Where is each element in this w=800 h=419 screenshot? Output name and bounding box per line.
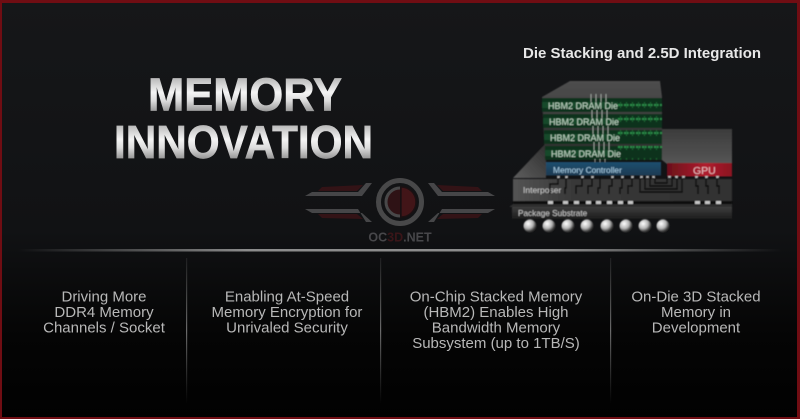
text: memory encryption: Unrivaled Security [226, 320, 348, 336]
HBM2 DRAM die 2: HBM2 DRAM Die [549, 117, 619, 127]
through-silicon vias [591, 94, 609, 166]
watermark logo: OC3D.NET [305, 180, 495, 244]
GPU die [667, 163, 732, 177]
text: DDR4 memory channels: DDR4 Memory [54, 304, 154, 321]
text: HBM2 stacked memory: Subsystem (up to 1TB/S) [412, 335, 580, 352]
memory controller [546, 162, 661, 176]
solder balls [524, 220, 670, 232]
horizontal divider [18, 249, 782, 252]
HBM2 DRAM die 4 [545, 146, 662, 160]
title: Memory Innovation: INNOVATION [114, 116, 373, 168]
text: DDR4 memory channels: Driving More [61, 288, 147, 306]
logo wordmark: OC3D.NET [368, 230, 432, 244]
text: on-die 3D stacked memory: Memory in [661, 304, 731, 321]
heading: Die Stacking and 2.5D Integration: Die Stacking and 2.5D Integration [523, 45, 761, 62]
text: memory encryption: Enabling At-Speed [225, 288, 349, 306]
HBM2 DRAM die 3 [544, 130, 662, 144]
column dividers [186, 258, 611, 404]
GPU die: GPU [693, 165, 716, 177]
GPU housing block [662, 129, 732, 164]
logo ring [378, 180, 422, 224]
interposer layer: Interposer [523, 185, 561, 195]
text: HBM2 stacked memory: On-Chip Stacked Memory [410, 288, 583, 306]
HBM2 DRAM die 1: HBM2 DRAM Die [548, 101, 618, 111]
text: HBM2 stacked memory: (HBM2) Enables High [423, 304, 569, 321]
stack top face [542, 81, 662, 160]
title: Memory Innovation [114, 68, 373, 168]
micro bumps [557, 176, 719, 178]
memory controller: Memory Controller [553, 165, 622, 175]
text: on-die 3D stacked memory: Development [652, 320, 741, 336]
HBM2 DRAM die 2 [543, 114, 662, 128]
logo wings [305, 183, 495, 222]
text: HBM2 stacked memory: Bandwidth Memory [432, 320, 561, 336]
interposer bumps [548, 201, 721, 204]
interposer layer [513, 178, 732, 201]
package substrate layer: Package Substrate [518, 209, 588, 218]
HBM2 DRAM die 4: HBM2 DRAM Die [551, 149, 621, 159]
interposer top slope [513, 143, 546, 178]
HBM2 DRAM die 1 [542, 98, 662, 112]
text: memory encryption: Memory Encryption for [212, 304, 362, 321]
package substrate layer [509, 201, 732, 219]
diagram: die stack and 2.5D package [509, 81, 732, 232]
text: DDR4 memory channels: Channels / Socket [43, 320, 166, 336]
title: Memory Innovation: MEMORY [148, 68, 342, 120]
text: on-die 3D stacked memory: On-Die 3D Stacked [631, 288, 761, 306]
HBM2 DRAM die 3: HBM2 DRAM Die [550, 133, 620, 143]
